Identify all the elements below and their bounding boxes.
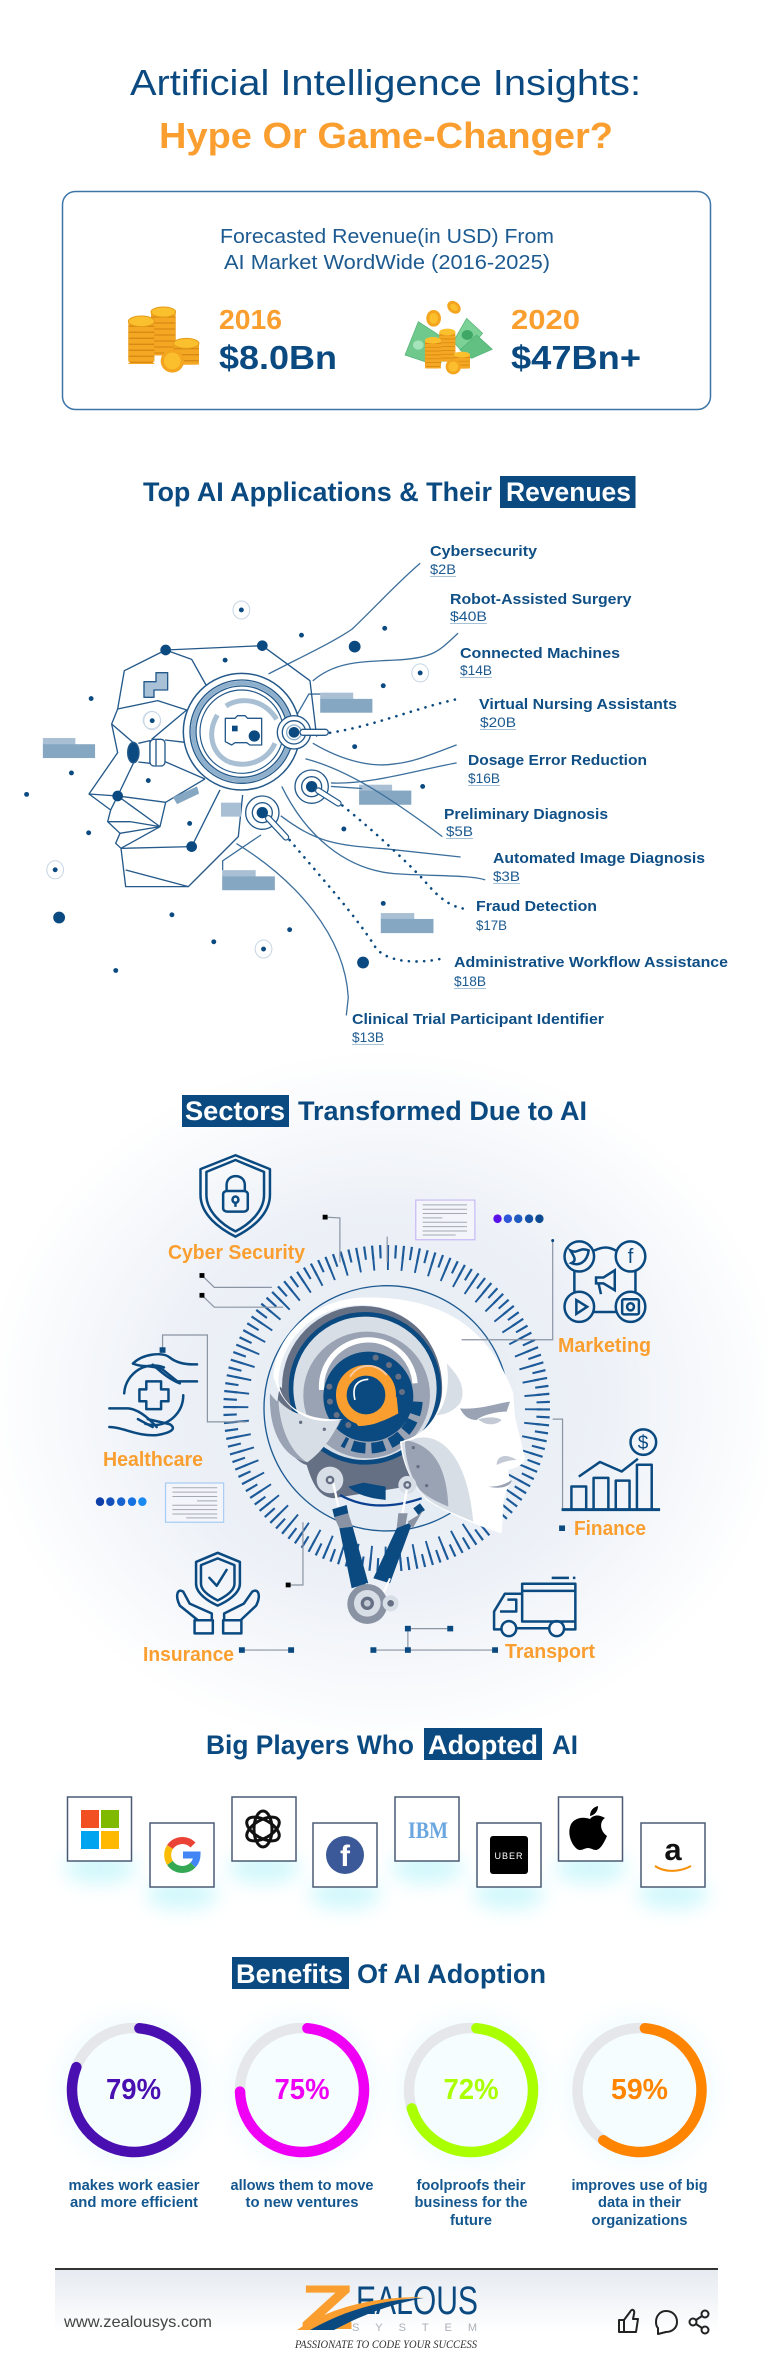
caption: future [450, 2212, 492, 2229]
text: 2016 figure: 2016 [219, 304, 282, 335]
heading: benefits: Of AI Adoption [357, 1959, 546, 1989]
logo: Microsoft [68, 1797, 132, 1861]
text: 2020 figure: 2020 [511, 304, 580, 335]
logo: Zealous System: EALOUS [356, 2279, 478, 2323]
caption: organizations [592, 2212, 688, 2229]
logo: Amazon: a [664, 1832, 682, 1867]
label: Marketing: Marketing [558, 1335, 651, 1357]
chart: benefit 72% [391, 2010, 551, 2229]
icon: polygon robot head [89, 640, 338, 887]
label: Cybersecurity $2B: Cybersecurity [430, 543, 538, 560]
heading: top AI applications: Top AI Applications & Their [143, 477, 492, 507]
label: Transport: Transport [505, 1641, 595, 1663]
icon: finance chart: $ [638, 1433, 649, 1454]
caption: data in their [598, 2194, 681, 2211]
title: Artificial Intelligence Insights: [130, 62, 641, 103]
website url: www.zealousys.com [63, 2314, 212, 2331]
caption [414, 2177, 528, 2229]
logo: IBM [395, 1797, 459, 1861]
label: Administrative Workflow Assistance $18B: $18B [454, 973, 486, 989]
logo: IBM: IBM [408, 1818, 448, 1843]
icon: marketing social network [565, 1241, 645, 1322]
logo: Zealous System: PASSIONATE TO CODE YOUR SUCCESS [294, 2339, 477, 2351]
label: Cyber Security: Cyber Security [168, 1242, 306, 1264]
title [130, 62, 641, 156]
label: Dosage Error Reduction $16B: Dosage Error Reduction [468, 752, 647, 769]
label: Robot-Assisted Surgery $40B: Robot-Assisted Surgery [450, 591, 632, 608]
chart: benefit 75%: 75% [274, 2074, 330, 2106]
background glow: sectors [0, 1050, 768, 1750]
heading: sectors transformed: Sectors [185, 1096, 285, 1126]
heading: big players: Big Players Who [206, 1730, 414, 1760]
chart: benefit 59%: 59% [611, 2074, 668, 2106]
label: Robot-Assisted Surgery $40B: $40B [450, 608, 487, 624]
label: Virtual Nursing Assistants $20B [479, 696, 677, 730]
heading: benefits [232, 1957, 546, 1989]
caption [68, 2177, 200, 2211]
icon: comment bubble [656, 2311, 677, 2334]
logo: OpenAI [232, 1797, 296, 1861]
caption [572, 2177, 708, 2229]
caption: foolproofs their [416, 2177, 526, 2194]
label: Automated Image Diagnosis $3B [493, 850, 705, 884]
label: Virtual Nursing Assistants $20B: $20B [480, 714, 516, 730]
label: Connected Machines $14B [460, 645, 620, 678]
decorative document cards and dots [96, 1200, 544, 1522]
title: Hype Or Game-Changer? [159, 115, 613, 156]
label: Administrative Workflow Assistance $18B: Administrative Workflow Assistance [454, 954, 728, 971]
icon: coin stacks [128, 307, 199, 373]
heading: top AI applications: Revenues [506, 477, 631, 507]
logo: Zealous System: SYSTEM [352, 2322, 477, 2334]
icon: transport truck [494, 1578, 575, 1636]
label: Virtual Nursing Assistants $20B: Virtual Nursing Assistants [479, 696, 677, 713]
icon: cyber security shield [200, 1155, 270, 1237]
text: 2016 figure [219, 304, 337, 376]
heading: big players: Adopted [428, 1730, 538, 1760]
panel subtitle [220, 226, 554, 274]
icon: finance chart [562, 1429, 660, 1510]
panel: forecasted revenue [62, 192, 710, 410]
heading: big players: AI [552, 1730, 578, 1760]
chart: benefit 59% [560, 2010, 720, 2229]
label: Fraud Detection $17B: $17B [476, 917, 507, 933]
label: Clinical Trial Participant Identifier $13B: Clinical Trial Participant Identifier [352, 1011, 604, 1028]
label: Connected Machines $14B: $14B [460, 662, 492, 678]
logo: Facebook: f [340, 1840, 351, 1873]
label: Dosage Error Reduction $16B: $16B [468, 770, 500, 786]
text: 2020 figure [511, 304, 641, 376]
logo: Facebook [313, 1823, 377, 1887]
label: Fraud Detection $17B [476, 898, 597, 933]
label: Connected Machines $14B: Connected Machines [460, 645, 620, 662]
logo: Uber: UBER [494, 1851, 524, 1861]
logo: Amazon [641, 1823, 705, 1887]
caption: improves use of big [572, 2177, 708, 2194]
logo: Zealous System [294, 2273, 478, 2351]
caption: makes work easier [68, 2177, 200, 2194]
label: Clinical Trial Participant Identifier $13B: $13B [352, 1029, 384, 1045]
label: Robot-Assisted Surgery $40B [450, 591, 632, 624]
logo: Zealous System: Z [300, 2273, 354, 2343]
icon: money and coins [405, 298, 492, 374]
label: Preliminary Diagnosis $5B: $5B [446, 823, 473, 839]
logo: Apple [558, 1797, 622, 1861]
label: Clinical Trial Participant Identifier $13B [352, 1011, 604, 1045]
footer [55, 2268, 718, 2351]
chart: AI head with application revenues [24, 543, 728, 1045]
text: 2020 figure: $47Bn+ [511, 339, 641, 376]
heading: top AI applications [143, 476, 636, 508]
label: Cybersecurity $2B [430, 543, 538, 577]
icon: healthcare hands and cross [109, 1354, 197, 1435]
icon: thumbs up [619, 2310, 638, 2332]
heading: sectors transformed [182, 1095, 587, 1127]
heading: big players [206, 1728, 578, 1760]
label: Cybersecurity $2B: $2B [430, 561, 456, 577]
chart: benefit 75% [222, 2010, 382, 2211]
icon: share [690, 2310, 708, 2334]
label: Preliminary Diagnosis $5B: Preliminary Diagnosis [444, 806, 608, 823]
heading: benefits: Benefits [236, 1959, 343, 1989]
caption: and more efficient [70, 2194, 198, 2211]
caption [230, 2177, 374, 2211]
label: Dosage Error Reduction $16B [468, 752, 647, 786]
heading: sectors transformed: Transformed Due to AI [298, 1096, 587, 1126]
label: Fraud Detection $17B: Fraud Detection [476, 898, 597, 915]
logo: Google [150, 1823, 214, 1887]
icon: insurance shield and hands [177, 1553, 259, 1633]
caption: to new ventures [246, 2194, 358, 2211]
connector lines and scatter dots [24, 563, 485, 1015]
chart: benefit 72%: 72% [444, 2074, 499, 2106]
logo grid: big players [64, 1797, 709, 1910]
diagram: sectors transformed due to AI [96, 1155, 660, 1666]
chart: benefit 79%: 79% [106, 2074, 161, 2106]
text: 2016 figure: $8.0Bn [219, 339, 337, 376]
caption: allows them to move [230, 2177, 374, 2194]
label: Insurance: Insurance [143, 1644, 234, 1666]
connector lines and nodes [160, 1215, 565, 1653]
label: Finance: Finance [574, 1518, 646, 1540]
panel subtitle: AI Market WordWide (2016-2025) [224, 252, 550, 274]
label: Administrative Workflow Assistance $18B [454, 954, 728, 989]
label: Preliminary Diagnosis $5B [444, 806, 608, 839]
robot head with tick ring [230, 1252, 543, 1624]
chart: benefit 79% [54, 2010, 214, 2211]
caption: business for the [414, 2194, 528, 2211]
label: Automated Image Diagnosis $3B: $3B [493, 868, 520, 884]
label: Healthcare: Healthcare [103, 1449, 203, 1471]
panel subtitle: Forecasted Revenue(in USD) From [220, 226, 554, 248]
label: Automated Image Diagnosis $3B: Automated Image Diagnosis [493, 850, 705, 867]
icon: marketing social network: f [628, 1246, 634, 1268]
logo: Uber [477, 1823, 541, 1887]
